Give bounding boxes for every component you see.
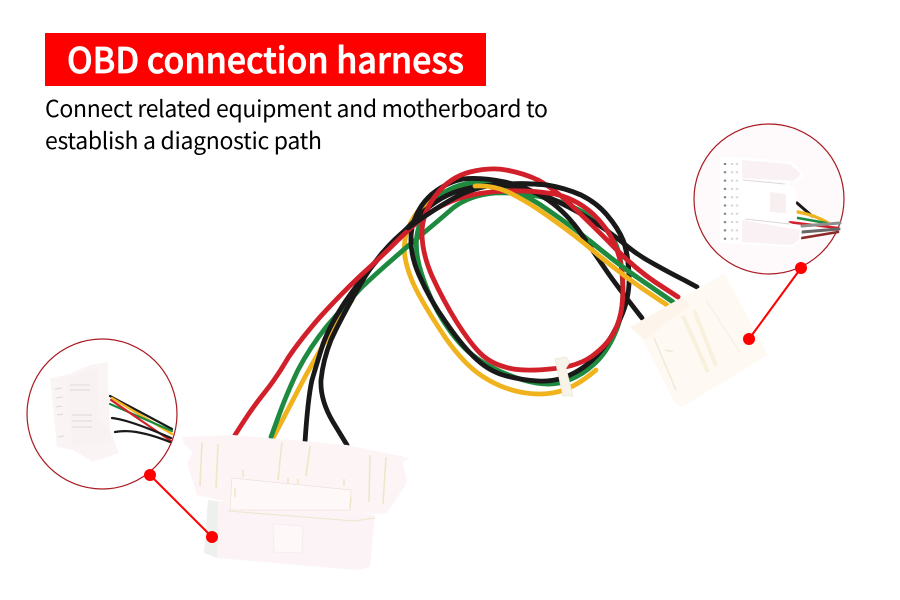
right connector: [630, 273, 768, 407]
cable tie: [555, 357, 573, 396]
left zoom callout: [27, 339, 177, 489]
left inset connector: [50, 362, 119, 462]
right inset wires: [788, 203, 840, 238]
title banner: OBD connection harness: [67, 33, 464, 84]
right zoom callout: [694, 124, 844, 274]
description text: Connect related equipment and motherboard to: [45, 90, 548, 124]
description text: establish a diagnostic path: [45, 122, 322, 156]
wiring harness: [235, 169, 697, 445]
right inset connector: [720, 157, 803, 247]
left inset wires: [110, 396, 172, 442]
description text: [45, 90, 548, 156]
OBD connector: [182, 435, 410, 570]
left pointer line with dots: [144, 469, 218, 543]
right pointer line with dots: [743, 262, 807, 345]
